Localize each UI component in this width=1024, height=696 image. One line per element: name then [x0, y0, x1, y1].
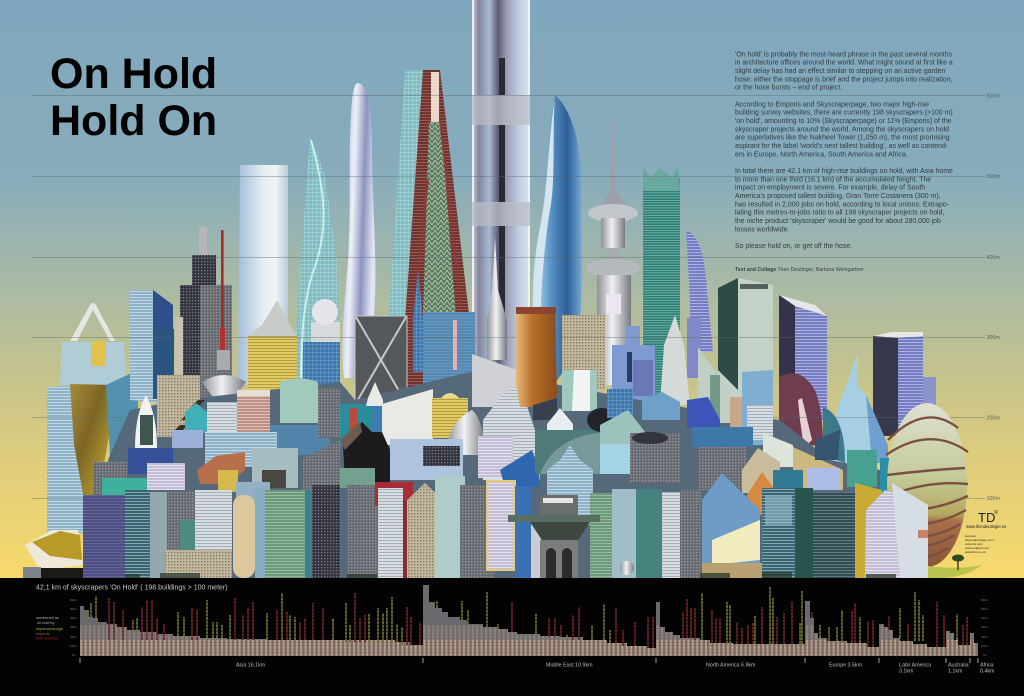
credits: Text and Collage Theo Deutinger, Barbara Weingartner	[735, 267, 864, 273]
building: yellow pyramid-top tower	[248, 300, 297, 412]
continent totals: Europe 3.5km	[829, 662, 863, 668]
ground shadow with trees	[125, 572, 896, 578]
title: Hold On	[50, 97, 217, 145]
right height scale: 500m	[981, 607, 989, 611]
building: purple arc tower	[686, 230, 713, 378]
continent totals	[236, 662, 995, 674]
building: red truss tower	[405, 70, 474, 400]
introduction text block: building survey websites, there are currently 198 skyscrapers (>100 m)	[735, 110, 953, 117]
building: white crown tower	[660, 315, 690, 405]
bar chart: building heights by continent	[80, 580, 980, 657]
building: grey lattice tower	[562, 315, 605, 390]
continent totals: 0.4km	[980, 668, 995, 674]
building: sky tower with two discs	[586, 118, 640, 385]
grid lines with height scale: 200m	[986, 416, 1000, 422]
building: gold crumpled vase	[70, 384, 113, 510]
mid layer: right blocks	[687, 347, 910, 515]
chart heading: 42,1 km of skyscrapers 'On Hold' ( 198 buildings > 100 meter)	[36, 584, 228, 592]
right height scale: 0m	[983, 653, 988, 657]
chart legend: both sources	[36, 636, 58, 640]
TD logo and sources	[965, 509, 1006, 554]
introduction text block: According to Emporis and Skyscraperpage, two major high-rise	[735, 101, 929, 108]
mound with palm trees	[928, 554, 982, 578]
introduction text block: So please hold on, or get off the hose.	[735, 243, 852, 250]
chart legend	[36, 616, 63, 640]
building: pointed sail tower	[833, 353, 888, 463]
introduction text block: impact on employment is severe. For example, delay of South	[735, 185, 925, 192]
continent totals: Australia	[948, 662, 969, 668]
right height scale: 400m	[981, 616, 989, 620]
left height scale	[70, 598, 78, 657]
building: JW Marriott slab	[718, 278, 773, 400]
chart legend: skyscraperpage	[36, 627, 63, 631]
mid layer: centre blocks	[340, 307, 680, 525]
building: blue faceted tower	[130, 290, 174, 405]
building: Shanghai glass cylinder	[238, 165, 288, 385]
building: blue banded drum	[423, 312, 475, 402]
name labels on bars, listed by both sources	[109, 593, 967, 648]
building: twisting blue tower	[533, 95, 582, 382]
building: gate structure	[508, 495, 600, 578]
building: white spire	[487, 237, 507, 360]
continent totals: 3.1km	[899, 668, 914, 674]
left height scale: 600m	[70, 598, 78, 602]
building: twisted white spire	[343, 83, 375, 378]
introduction text block: losses worldwide.	[735, 226, 789, 233]
left height scale: 500m	[70, 607, 78, 611]
introduction text block: are superlatives like the Nakheel Tower (1,050 m), the most promising	[735, 135, 950, 142]
chart legend: on hold by	[37, 621, 55, 625]
TD logo and sources: ©	[994, 509, 998, 516]
building: red antenna tower	[202, 230, 246, 399]
TD logo and sources: TD	[978, 510, 995, 525]
grid lines with height scale	[32, 94, 1000, 502]
right height scale: 600m	[981, 598, 989, 602]
TD logo and sources: www.oobject.com	[965, 546, 989, 550]
introduction text block: lating this metres-to-jobs ratio to all 198 skyscraper projects on hold,	[735, 210, 944, 217]
continent tick marks	[80, 658, 978, 663]
building: blue needle tower	[413, 270, 423, 372]
right height scale: 200m	[981, 635, 989, 639]
introduction text block: or the hose bursts – end of project.	[735, 85, 842, 92]
building: dark and blue tower with white roof	[779, 295, 827, 420]
building: blue stepped tower	[612, 326, 655, 400]
left height scale: 200m	[70, 635, 78, 639]
introduction text block: has resulted in 2,000 jobs on hold, according to local unions. Extrapo-	[735, 201, 949, 208]
building: pale triangular tower	[388, 70, 423, 325]
introduction text block: America's proposed tallest building, Gran Torre Costanera (300 m),	[735, 193, 941, 200]
name labels on bars, listed by one source	[87, 587, 957, 645]
left height scale: 300m	[70, 625, 78, 629]
front layer: right buildings	[680, 473, 928, 578]
continent totals: Africa	[980, 662, 994, 668]
continent totals: Latin America	[899, 662, 931, 668]
front layer: left buildings	[83, 485, 340, 578]
TD logo and sources: sources	[965, 534, 976, 538]
building: blue curved slab	[106, 370, 138, 455]
introduction text block: slight delay has had an effect similar to stepping on an active garden	[735, 68, 946, 75]
building: glass egg with brown rings	[886, 403, 968, 567]
continent totals: 1.1km	[948, 668, 963, 674]
introduction text block: to more than one third (16.1 km) of the accumulated height. The	[735, 176, 931, 183]
mid layer: left blocks	[93, 317, 340, 502]
building: second dark and blue tower	[873, 332, 936, 436]
introduction text block: ers in Europe, North America, South America and Africa.	[735, 151, 908, 158]
right height scale: 100m	[981, 644, 989, 648]
building: green crown tower	[643, 166, 680, 403]
TD logo and sources: www.theodeutinger.eu	[966, 524, 1006, 529]
TD logo and sources: skyscraperpage.com	[965, 538, 994, 542]
introduction text block: In total there are 42.1 km of high-rise buildings on hold, with Asia home	[735, 168, 953, 175]
grid lines with height scale: 300m	[986, 335, 1000, 341]
building: stepped black and grey tower with antenna	[180, 227, 232, 405]
chart legend: emporis	[36, 632, 50, 636]
continent totals: North America 6.9km	[706, 662, 756, 668]
right height scale	[981, 598, 989, 657]
grid lines with height scale: 600m	[986, 94, 1000, 100]
introduction text block: hose: either the stoppage is brief and the project jumps into realization,	[735, 76, 953, 83]
introduction text block: 'On hold' is probably the most-heard phrase in the past several months	[735, 51, 953, 58]
grid lines with height scale: 400m	[986, 255, 1000, 261]
building: purple shell	[779, 373, 823, 448]
TD logo and sources: www.bbc.co.uk	[965, 550, 986, 554]
introduction text block: aspirant for the label 'world's next tallest building', as well as contend-	[735, 143, 948, 150]
continent totals: Middle East 10.9km	[546, 662, 593, 668]
left height scale: 400m	[70, 616, 78, 620]
title: On Hold	[50, 50, 217, 98]
introduction text block: skyscraper projects around the world. Among the skyscrapers on hold	[735, 126, 949, 133]
introduction text block: the niche product 'skyscraper' would be good for about 280,000 job	[735, 218, 941, 225]
introduction text block: in architecture offices around the world. What might sound at first like a	[735, 60, 953, 67]
building: central Nakheel tower	[472, 0, 530, 378]
backdrop mass behind the front buildings	[88, 372, 930, 578]
continent totals: Asia 16.1km	[236, 662, 266, 668]
TD logo and sources: emporis.com	[965, 542, 983, 546]
grid lines with height scale: 100m	[986, 496, 1000, 502]
building: Bank of China with X bracing	[355, 316, 407, 404]
left height scale: 0m	[72, 653, 77, 657]
grid lines with height scale: 500m	[986, 174, 1000, 180]
building: left pale tower base	[47, 385, 95, 533]
introduction text block: 'on hold', amounting to 10% (Skyscraperpage) or 11% (Emporis) of the	[735, 118, 952, 125]
gold crumpled pavilion	[23, 530, 83, 578]
left height scale: 100m	[70, 644, 78, 648]
front layer: centre buildings	[340, 468, 680, 578]
panel: black chart band	[0, 578, 1024, 672]
right height scale: 300m	[981, 625, 989, 629]
building: twisted teal lattice tower	[293, 135, 340, 380]
building: white sphere and blue block	[303, 299, 340, 398]
building: arched crown tower	[60, 303, 126, 385]
chart legend: mentioned as	[36, 616, 59, 620]
